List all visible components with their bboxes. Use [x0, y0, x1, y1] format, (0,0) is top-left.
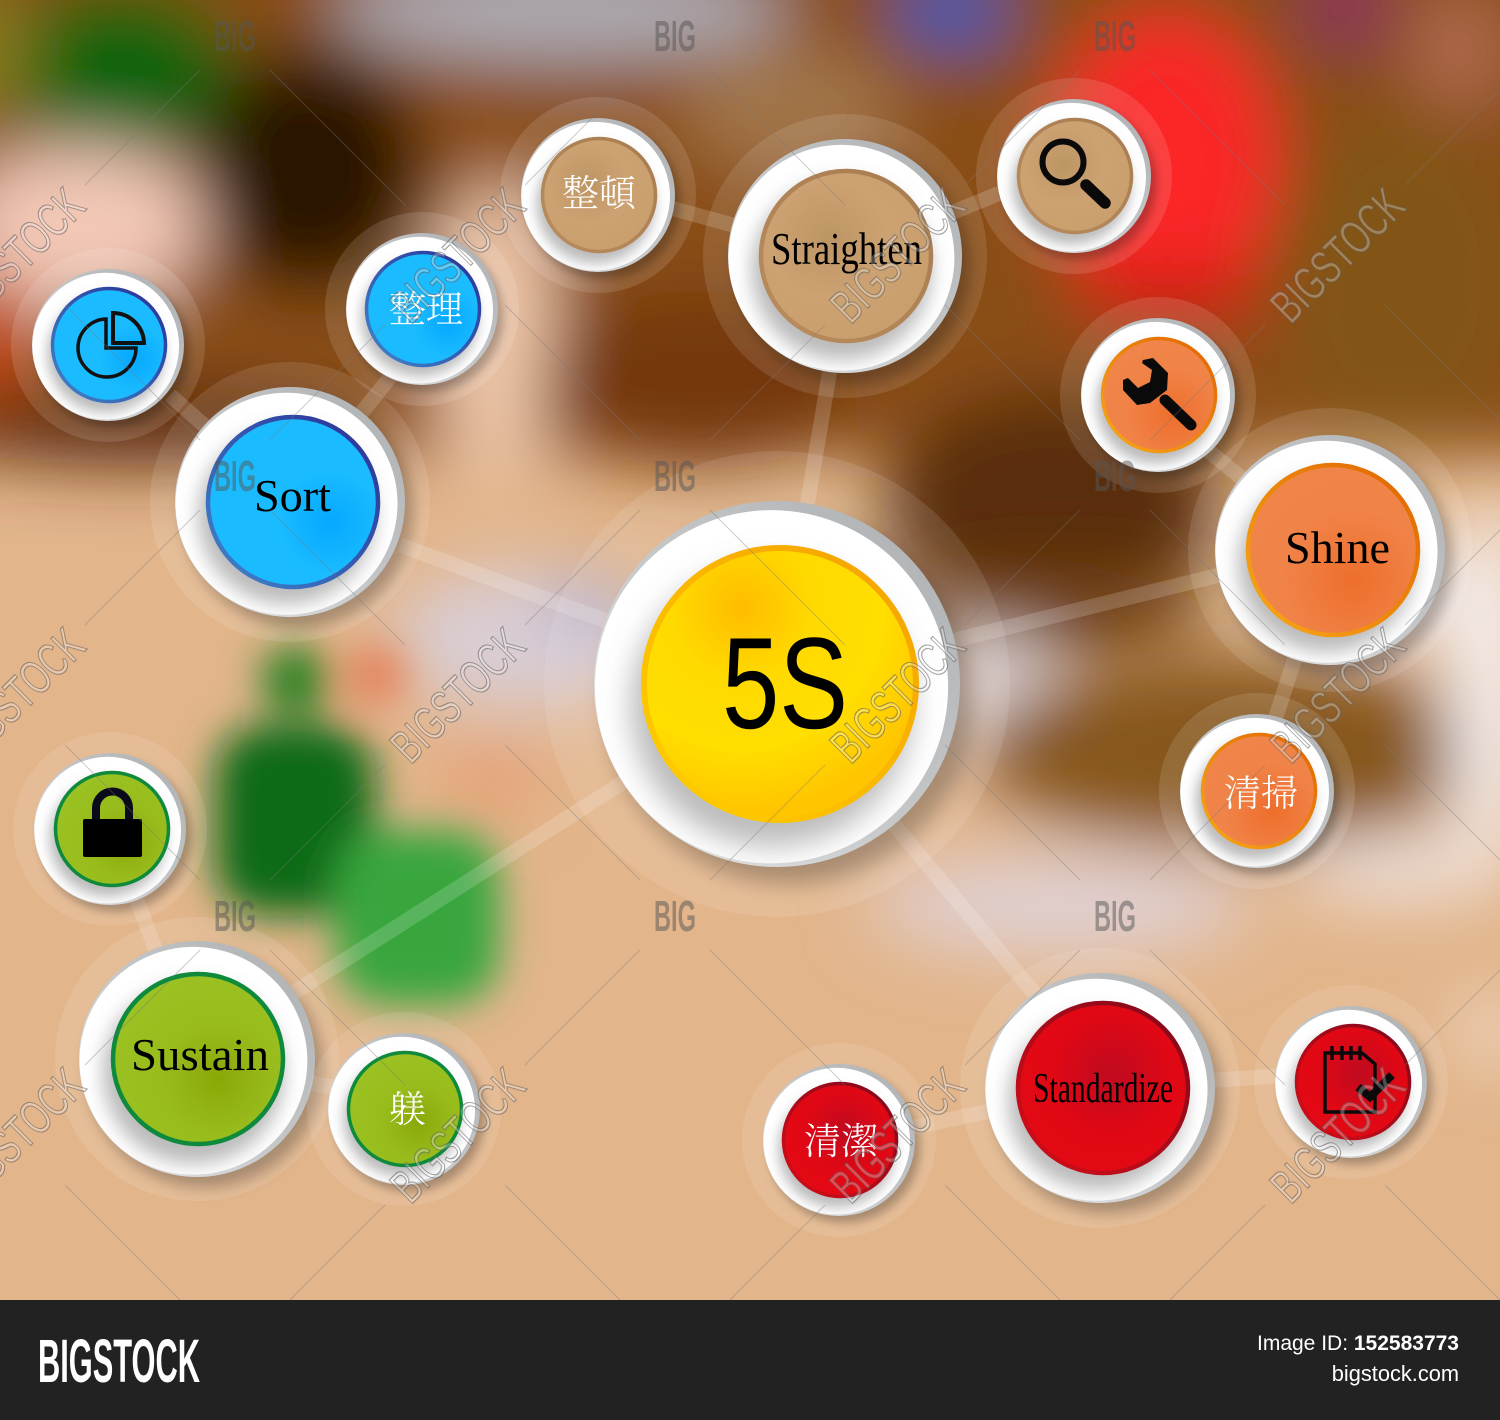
watermark: BIG labels: BIG [214, 452, 256, 501]
label: 清潔: 清潔 [804, 1121, 878, 1163]
label: 躾: 躾 [389, 1090, 426, 1131]
label: 整頓: 整頓 [562, 173, 636, 215]
node: Sustain [55, 917, 339, 1201]
watermark: BIGSTOCK diagonals: BIGSTOCK [381, 179, 535, 333]
icon: padlock [83, 792, 142, 857]
watermark: BIGSTOCK diagonals: BIGSTOCK [1261, 619, 1415, 773]
icon: magnifier [1042, 142, 1105, 203]
icon: pie chart [78, 313, 144, 377]
footer logo: BIGSTOCK [38, 1327, 200, 1395]
footer site: bigstock.com [1332, 1361, 1459, 1386]
watermark: BIG labels: BIG [654, 452, 696, 501]
node: 5S centre [544, 451, 1010, 917]
watermark: BIGSTOCK diagonals [0, 179, 1415, 1213]
label: 清掃: 清掃 [1224, 774, 1298, 815]
node: lock icon [13, 732, 207, 926]
node: Standardize [960, 948, 1240, 1228]
node: 躾 [307, 1012, 501, 1206]
watermark: BIG labels: BIG [1094, 12, 1136, 61]
watermark: BIG labels [214, 12, 1136, 941]
watermark: BIGSTOCK diagonals: BIGSTOCK [1261, 1059, 1415, 1213]
node: 整頓 [500, 97, 696, 293]
node: Straighten [703, 114, 987, 398]
node: 整理 [325, 212, 519, 406]
footer bar [0, 1300, 1500, 1420]
label: Standardize: Standardize [1033, 1066, 1173, 1112]
watermark: BIGSTOCK diagonals: BIGSTOCK [1261, 179, 1415, 333]
watermark: BIG labels: BIG [1094, 452, 1136, 501]
label: 整理: 整理 [389, 289, 463, 331]
node: 清掃 [1159, 693, 1355, 889]
icon: document with check [1325, 1046, 1392, 1112]
node: Sort [150, 362, 430, 642]
label: Shine: Shine [1285, 522, 1390, 573]
node: wrench icon [1060, 297, 1256, 493]
label: Straighten: Straighten [771, 223, 922, 274]
watermark: BIG labels: BIG [214, 892, 256, 941]
node: 清潔 [742, 1043, 936, 1237]
node: magnifier icon [976, 78, 1172, 274]
watermark: BIG labels: BIG [1094, 892, 1136, 941]
watermark: BIG labels: BIG [654, 892, 696, 941]
label: Sort: Sort [254, 470, 331, 521]
node: document check icon [1254, 985, 1448, 1179]
label: Sustain: Sustain [131, 1029, 269, 1080]
watermark: BIGSTOCK diagonals: BIGSTOCK [381, 619, 535, 773]
connector lines between nodes [135, 185, 1330, 1130]
watermark: BIGSTOCK diagonals: BIGSTOCK [821, 179, 975, 333]
label: 5S: 5S [722, 610, 848, 756]
node: Shine [1188, 408, 1472, 692]
watermark: BIG labels: BIG [214, 12, 256, 61]
watermark: BIG labels: BIG [654, 12, 696, 61]
icon: wrench [1123, 358, 1191, 425]
node: pie chart icon [11, 248, 205, 442]
watermark: BIGSTOCK diagonals: BIGSTOCK [381, 1059, 535, 1213]
footer image id: Image ID: 152583773 [1257, 1332, 1459, 1355]
watermark: BIGSTOCK diagonals: BIGSTOCK [821, 1059, 975, 1213]
watermark: BIGSTOCK diagonals: BIGSTOCK [821, 619, 975, 773]
